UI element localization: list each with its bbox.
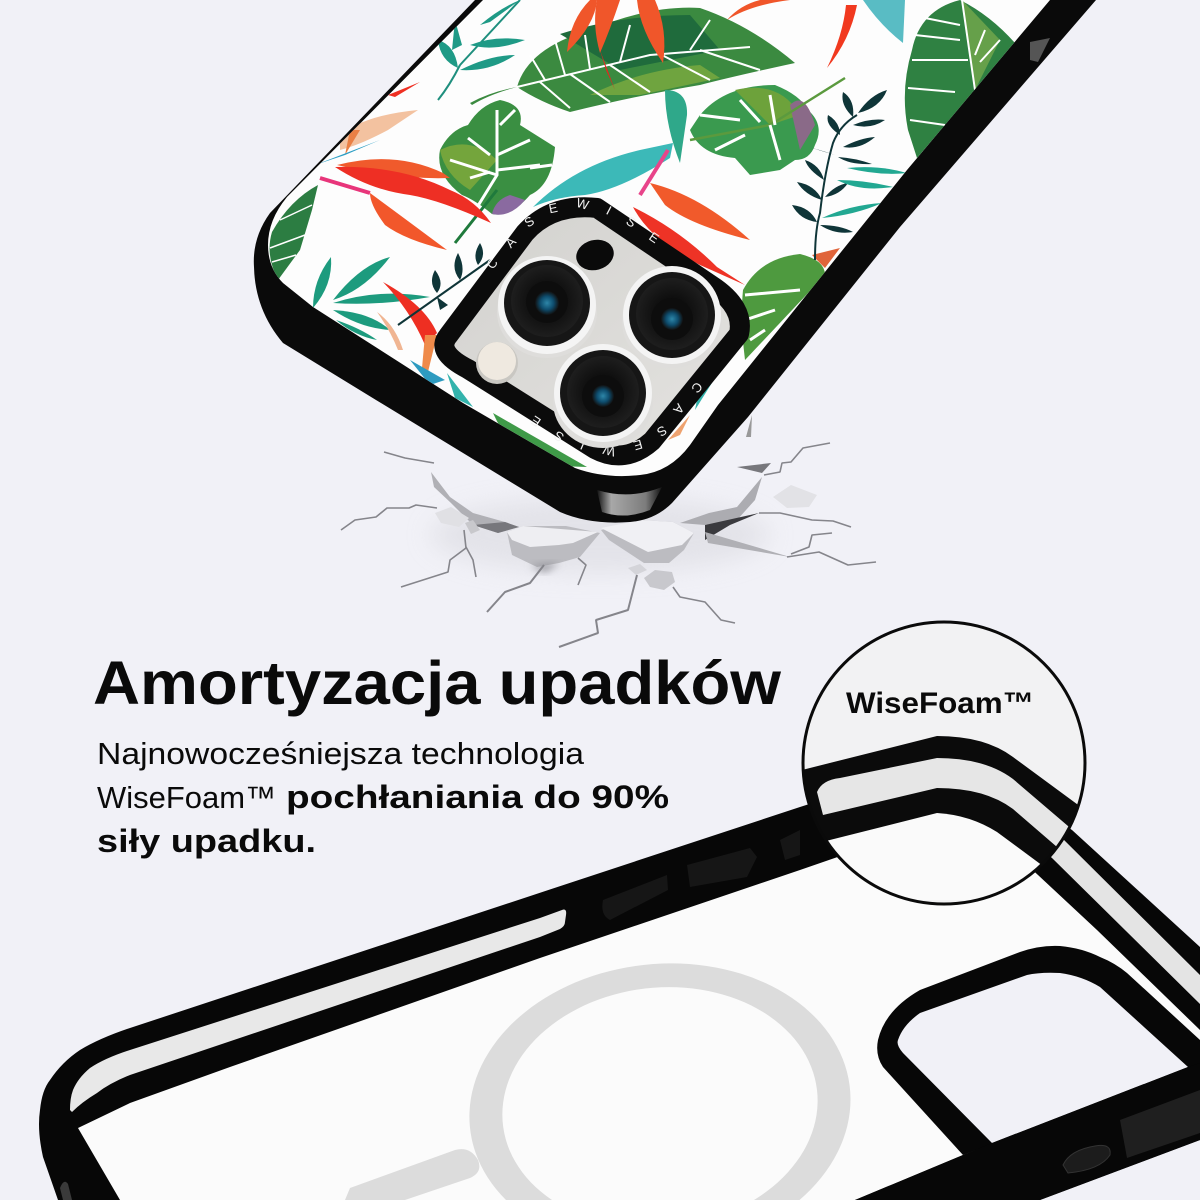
dark fern right xyxy=(792,90,887,260)
circle label: WiseFoam™ xyxy=(846,687,1034,720)
bird of paradise left xyxy=(315,82,491,250)
monstera leaf centre xyxy=(690,78,845,175)
case back with floral print xyxy=(268,0,1050,476)
bird of paradise teal wing xyxy=(533,143,673,207)
teal branch top left xyxy=(438,0,525,100)
monstera leaf lower right xyxy=(742,248,840,360)
bumper gloss xyxy=(597,487,662,516)
body paragraph: WiseFoam™ xyxy=(97,780,276,815)
debris chunk left xyxy=(507,526,600,567)
right banana leaf xyxy=(905,0,1015,158)
camera cutout opening xyxy=(898,973,1188,1143)
clear strip left xyxy=(70,910,566,1112)
teal blades right xyxy=(822,167,907,218)
phone bumper xyxy=(254,0,1096,523)
lens right xyxy=(622,266,722,368)
flash xyxy=(476,342,518,384)
magnetic ring xyxy=(469,963,851,1200)
sensor hole xyxy=(573,236,617,274)
camera ring and plate xyxy=(444,207,740,455)
port opening xyxy=(1063,1145,1110,1173)
body paragraph: pochłaniania do 90% xyxy=(286,779,669,815)
side button highlight xyxy=(1030,38,1050,62)
circle outline xyxy=(803,622,1085,904)
brand text top: CASEWISE xyxy=(488,198,660,268)
banana leaf top xyxy=(470,8,795,112)
clear back panel xyxy=(78,825,1200,1200)
lens bottom xyxy=(553,344,653,448)
lens left xyxy=(497,256,597,358)
bird of paradise orange petals top xyxy=(567,0,857,90)
magnified case corner xyxy=(804,736,1078,864)
teal leaf centre xyxy=(665,90,687,163)
body paragraph xyxy=(97,736,669,859)
magnet alignment pill xyxy=(345,1149,479,1200)
lower frame band xyxy=(855,1063,1200,1200)
bottom strip leaves xyxy=(447,373,715,467)
right rim xyxy=(680,477,762,525)
top phone with tropical case xyxy=(254,0,1096,523)
left banana leaf xyxy=(270,185,318,280)
left rim of crater xyxy=(431,472,519,533)
camera cutout frame xyxy=(877,946,1200,1155)
monstera leaf left xyxy=(439,100,555,243)
red petal lower left xyxy=(377,282,445,385)
body paragraph: Najnowocześniejsza technologia xyxy=(97,736,585,771)
heading: Amortyzacja upadków xyxy=(93,649,782,717)
charging hole xyxy=(60,1182,72,1200)
teal wing top right xyxy=(863,0,905,43)
crater: cracked surface under phone xyxy=(341,415,876,647)
small debris xyxy=(644,570,675,590)
bottom phone case, inside view xyxy=(39,775,1200,1200)
side buttons xyxy=(602,830,800,920)
magnifier circle xyxy=(790,622,1085,904)
bird of paradise right xyxy=(633,150,750,285)
body paragraph: siły upadku. xyxy=(97,823,316,859)
camera module xyxy=(434,197,750,466)
case outer frame xyxy=(39,775,1200,1200)
frame sheen xyxy=(1120,1090,1200,1158)
clear strip right xyxy=(1030,820,1200,1004)
teal blades lower left xyxy=(313,257,430,340)
crack lines xyxy=(341,443,876,647)
debris chunk right xyxy=(773,485,817,508)
dark branch behind camera xyxy=(398,243,490,325)
debris chunk centre xyxy=(601,520,694,563)
brand text bottom: CASEWISE xyxy=(531,383,702,457)
